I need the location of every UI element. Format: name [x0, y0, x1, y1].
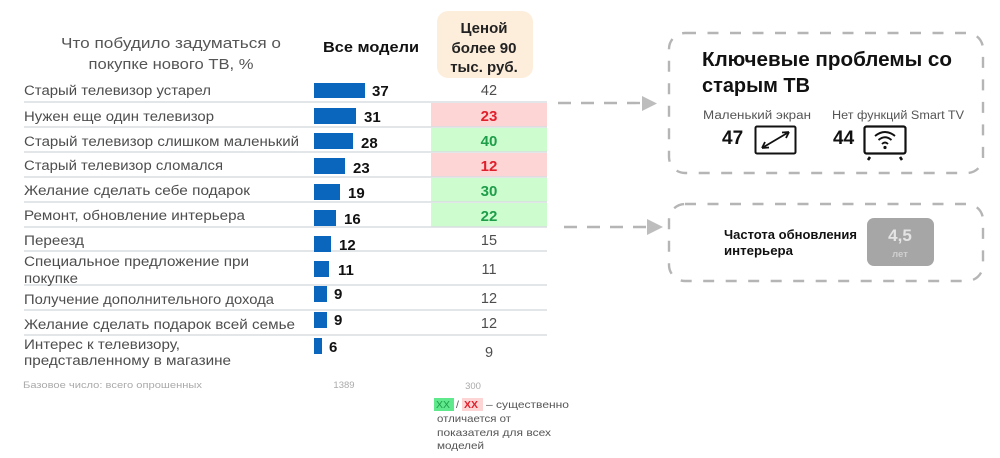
row: TV broke: Старый телевизор сломался: [24, 158, 223, 173]
row: gift to family: Желание сделать подарок всей семье: [24, 317, 295, 332]
row: outdated TV: [24, 83, 497, 100]
row: special offer: 11: [338, 262, 354, 279]
row: store display interest: Интерес к телевизору,: [24, 337, 180, 352]
row: renovation: Ремонт, обновление интерьера: [24, 208, 246, 223]
highlighted cells column: [431, 103, 547, 228]
base count row: 300: [465, 381, 481, 392]
panel: key problems with old TV: [669, 33, 983, 173]
row: gift to oneself: 19: [348, 185, 365, 202]
legend note: XX: [464, 399, 478, 411]
row: gift to oneself: [24, 183, 497, 202]
legend note: показателя для всех: [437, 427, 552, 439]
legend note: /: [456, 399, 459, 411]
stat: no Smart TV: 44: [833, 128, 855, 149]
column heading: over 90k rubles: более 90: [452, 40, 516, 57]
row: TV too small: 28: [361, 135, 378, 152]
row: gift to oneself: 30: [481, 183, 497, 200]
stat tile: 4.5 years: 4,5: [888, 226, 912, 245]
stat: small screen: [703, 110, 811, 154]
panel heading: старым ТВ: [702, 75, 810, 97]
row: moving: 15: [481, 233, 497, 249]
row: gift to family: 12: [481, 316, 497, 332]
stat: small screen: 47: [722, 128, 743, 149]
row: renovation: 16: [344, 211, 361, 228]
row: renovation: 22: [481, 208, 497, 225]
stat tile: 4.5 years: [867, 218, 934, 266]
row: one more TV needed: Нужен еще один телевизор: [24, 109, 214, 124]
legend note: моделей: [437, 440, 484, 452]
legend note: отличается от: [437, 413, 511, 425]
row: special offer: Специальное предложение при: [24, 254, 249, 269]
row: extra income: Получение дополнительного дохода: [24, 292, 275, 307]
row: one more TV needed: 23: [481, 108, 497, 125]
heading: chart question: покупке нового ТВ, %: [88, 56, 254, 73]
renovation frequency label: Частота обновления: [724, 228, 857, 242]
column heading: over 90k rubles: [437, 11, 533, 78]
row: moving: [24, 233, 497, 254]
base count row: 1389: [333, 380, 355, 391]
column heading: over 90k rubles: тыс. руб.: [450, 59, 518, 76]
row: outdated TV: Старый телевизор устарел: [24, 83, 211, 98]
legend note: XX: [436, 399, 450, 411]
renovation frequency label: интерьера: [724, 244, 794, 258]
row: extra income: [24, 286, 497, 307]
row: one more TV needed: [24, 108, 497, 126]
arrow: to renovation frequency: [564, 219, 663, 235]
legend note: [434, 398, 569, 452]
row: special offer: 11: [481, 262, 497, 278]
row: gift to family: 9: [334, 312, 342, 329]
legend note: – существенно: [486, 399, 569, 411]
stat: no Smart TV: Нет функций Smart TV: [832, 110, 964, 122]
row: extra income: 12: [481, 291, 497, 307]
heading: chart question: [61, 35, 281, 73]
row: TV too small: Старый телевизор слишком маленький: [24, 134, 299, 149]
stat: no Smart TV: [832, 110, 964, 160]
row: TV broke: [24, 158, 497, 177]
row: store display interest: [24, 337, 493, 368]
stat tile: 4.5 years: лет: [892, 249, 908, 260]
row: TV broke: 12: [481, 158, 497, 175]
row: special offer: [24, 254, 497, 286]
row: TV too small: 40: [481, 133, 497, 150]
row: outdated TV: 42: [481, 83, 497, 99]
row: store display interest: 9: [485, 345, 493, 361]
row: moving: Переезд: [24, 233, 84, 248]
column heading: all models: Все модели: [323, 39, 419, 56]
stat: small screen: Маленький экран: [703, 110, 811, 122]
row: TV broke: 23: [353, 160, 370, 177]
row: gift to oneself: Желание сделать себе подарок: [24, 183, 250, 198]
panel heading: Ключевые проблемы со: [702, 49, 952, 71]
row: moving: 12: [339, 237, 356, 254]
row: TV too small: [24, 133, 497, 152]
row: store display interest: представленному в магазине: [24, 353, 231, 368]
row: gift to family: [24, 312, 497, 332]
renovation frequency label: [724, 228, 857, 258]
row: renovation: [24, 208, 497, 228]
arrow: to key problems: [558, 96, 657, 111]
base count row: [23, 380, 481, 392]
panel heading: [702, 49, 952, 97]
base count row: Базовое число: всего опрошенных: [23, 380, 202, 391]
row: outdated TV: 37: [372, 83, 389, 100]
row: special offer: покупке: [24, 271, 78, 286]
panel: renovation frequency: [669, 204, 983, 281]
heading: chart question: Что побудило задуматься о: [61, 35, 281, 52]
row: one more TV needed: 31: [364, 109, 381, 126]
row: extra income: 9: [334, 286, 342, 303]
column heading: over 90k rubles: Ценой: [461, 20, 507, 37]
row: store display interest: 6: [329, 339, 337, 356]
